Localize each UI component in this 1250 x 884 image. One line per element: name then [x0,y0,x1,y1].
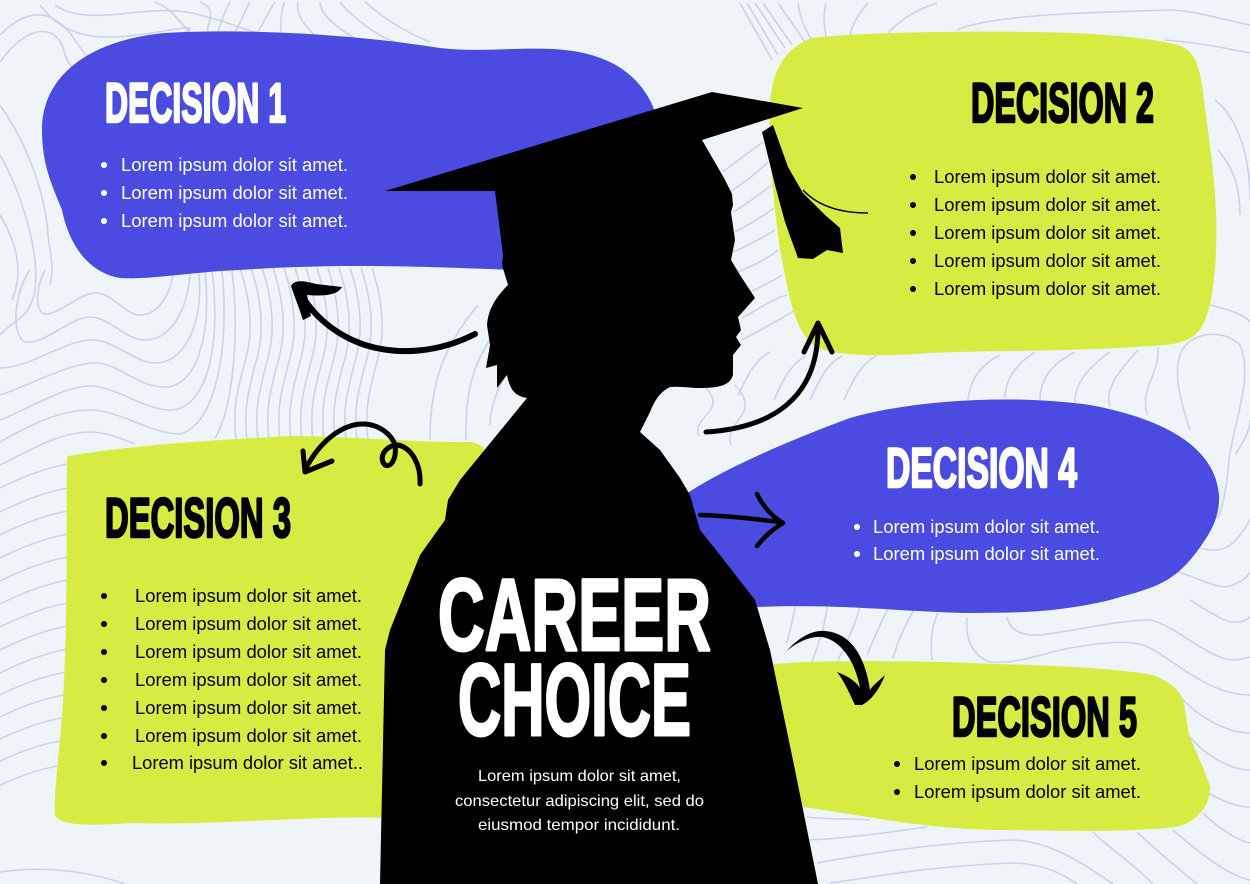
panel: decision 1 [42,31,656,278]
arrow: to decision 4 [700,494,783,546]
panel: decision 3 [55,436,490,825]
intro text [455,768,704,834]
heading: decision 4: DECISION 4 [886,436,1077,499]
arrow: to decision 3 [303,424,420,484]
list: decision 3: Lorem ipsum dolor sit amet. [135,726,362,746]
panel: decision 4 [680,399,1219,613]
list: decision 2: Lorem ipsum dolor sit amet. [934,251,1161,271]
title: CHOICE [458,643,691,757]
blob: decision 1 [42,31,656,278]
intro text: Lorem ipsum dolor sit amet, [478,768,681,785]
list: decision 4: Lorem ipsum dolor sit amet. [873,544,1100,564]
list: decision 5: Lorem ipsum dolor sit amet. [914,754,1141,774]
list: decision 1: Lorem ipsum dolor sit amet. [121,183,348,203]
blob: decision 4 [680,399,1219,613]
list: decision 3: Lorem ipsum dolor sit amet. [135,614,362,634]
list: decision 2: Lorem ipsum dolor sit amet. [934,279,1161,299]
list: decision 1 [101,155,348,231]
blob: decision 3 [55,436,490,825]
list: decision 2: Lorem ipsum dolor sit amet. [934,223,1161,243]
list: decision 2: Lorem ipsum dolor sit amet. [934,167,1161,187]
blob: decision 5 [765,661,1210,831]
heading: decision 3: DECISION 3 [105,486,291,549]
list: decision 3: Lorem ipsum dolor sit amet. [135,642,362,662]
list: decision 2: Lorem ipsum dolor sit amet. [934,195,1161,215]
heading: decision 1: DECISION 1 [105,71,286,134]
list: decision 4 [854,517,1100,564]
list: decision 1: Lorem ipsum dolor sit amet. [121,155,348,175]
title [438,558,711,757]
list: decision 1: Lorem ipsum dolor sit amet. [121,211,348,231]
blob: decision 2 [770,32,1216,355]
list: decision 3: Lorem ipsum dolor sit amet.. [132,753,363,773]
list: decision 3: Lorem ipsum dolor sit amet. [135,698,362,718]
graduate silhouette [380,92,868,884]
list: decision 3 [101,586,363,773]
list: decision 5 [894,754,1141,802]
list: decision 4: Lorem ipsum dolor sit amet. [873,517,1100,537]
list: decision 3: Lorem ipsum dolor sit amet. [135,586,362,606]
tassel [762,125,843,259]
intro text: eiusmod tempor incididunt. [478,817,680,834]
panel: decision 2 [770,32,1216,355]
panel: decision 5 [765,661,1210,831]
list: decision 3: Lorem ipsum dolor sit amet. [135,670,362,690]
list: decision 2 [910,167,1161,299]
silhouette: body and cap [380,92,818,884]
arrow: to decision 2 [706,323,832,432]
arrow: to decision 1 [291,281,475,351]
arrow: to decision 5 [786,631,885,705]
list: decision 5: Lorem ipsum dolor sit amet. [914,782,1141,802]
title: CAREER [438,558,711,672]
intro text: consectetur adipiscing elit, sed do [455,793,704,810]
